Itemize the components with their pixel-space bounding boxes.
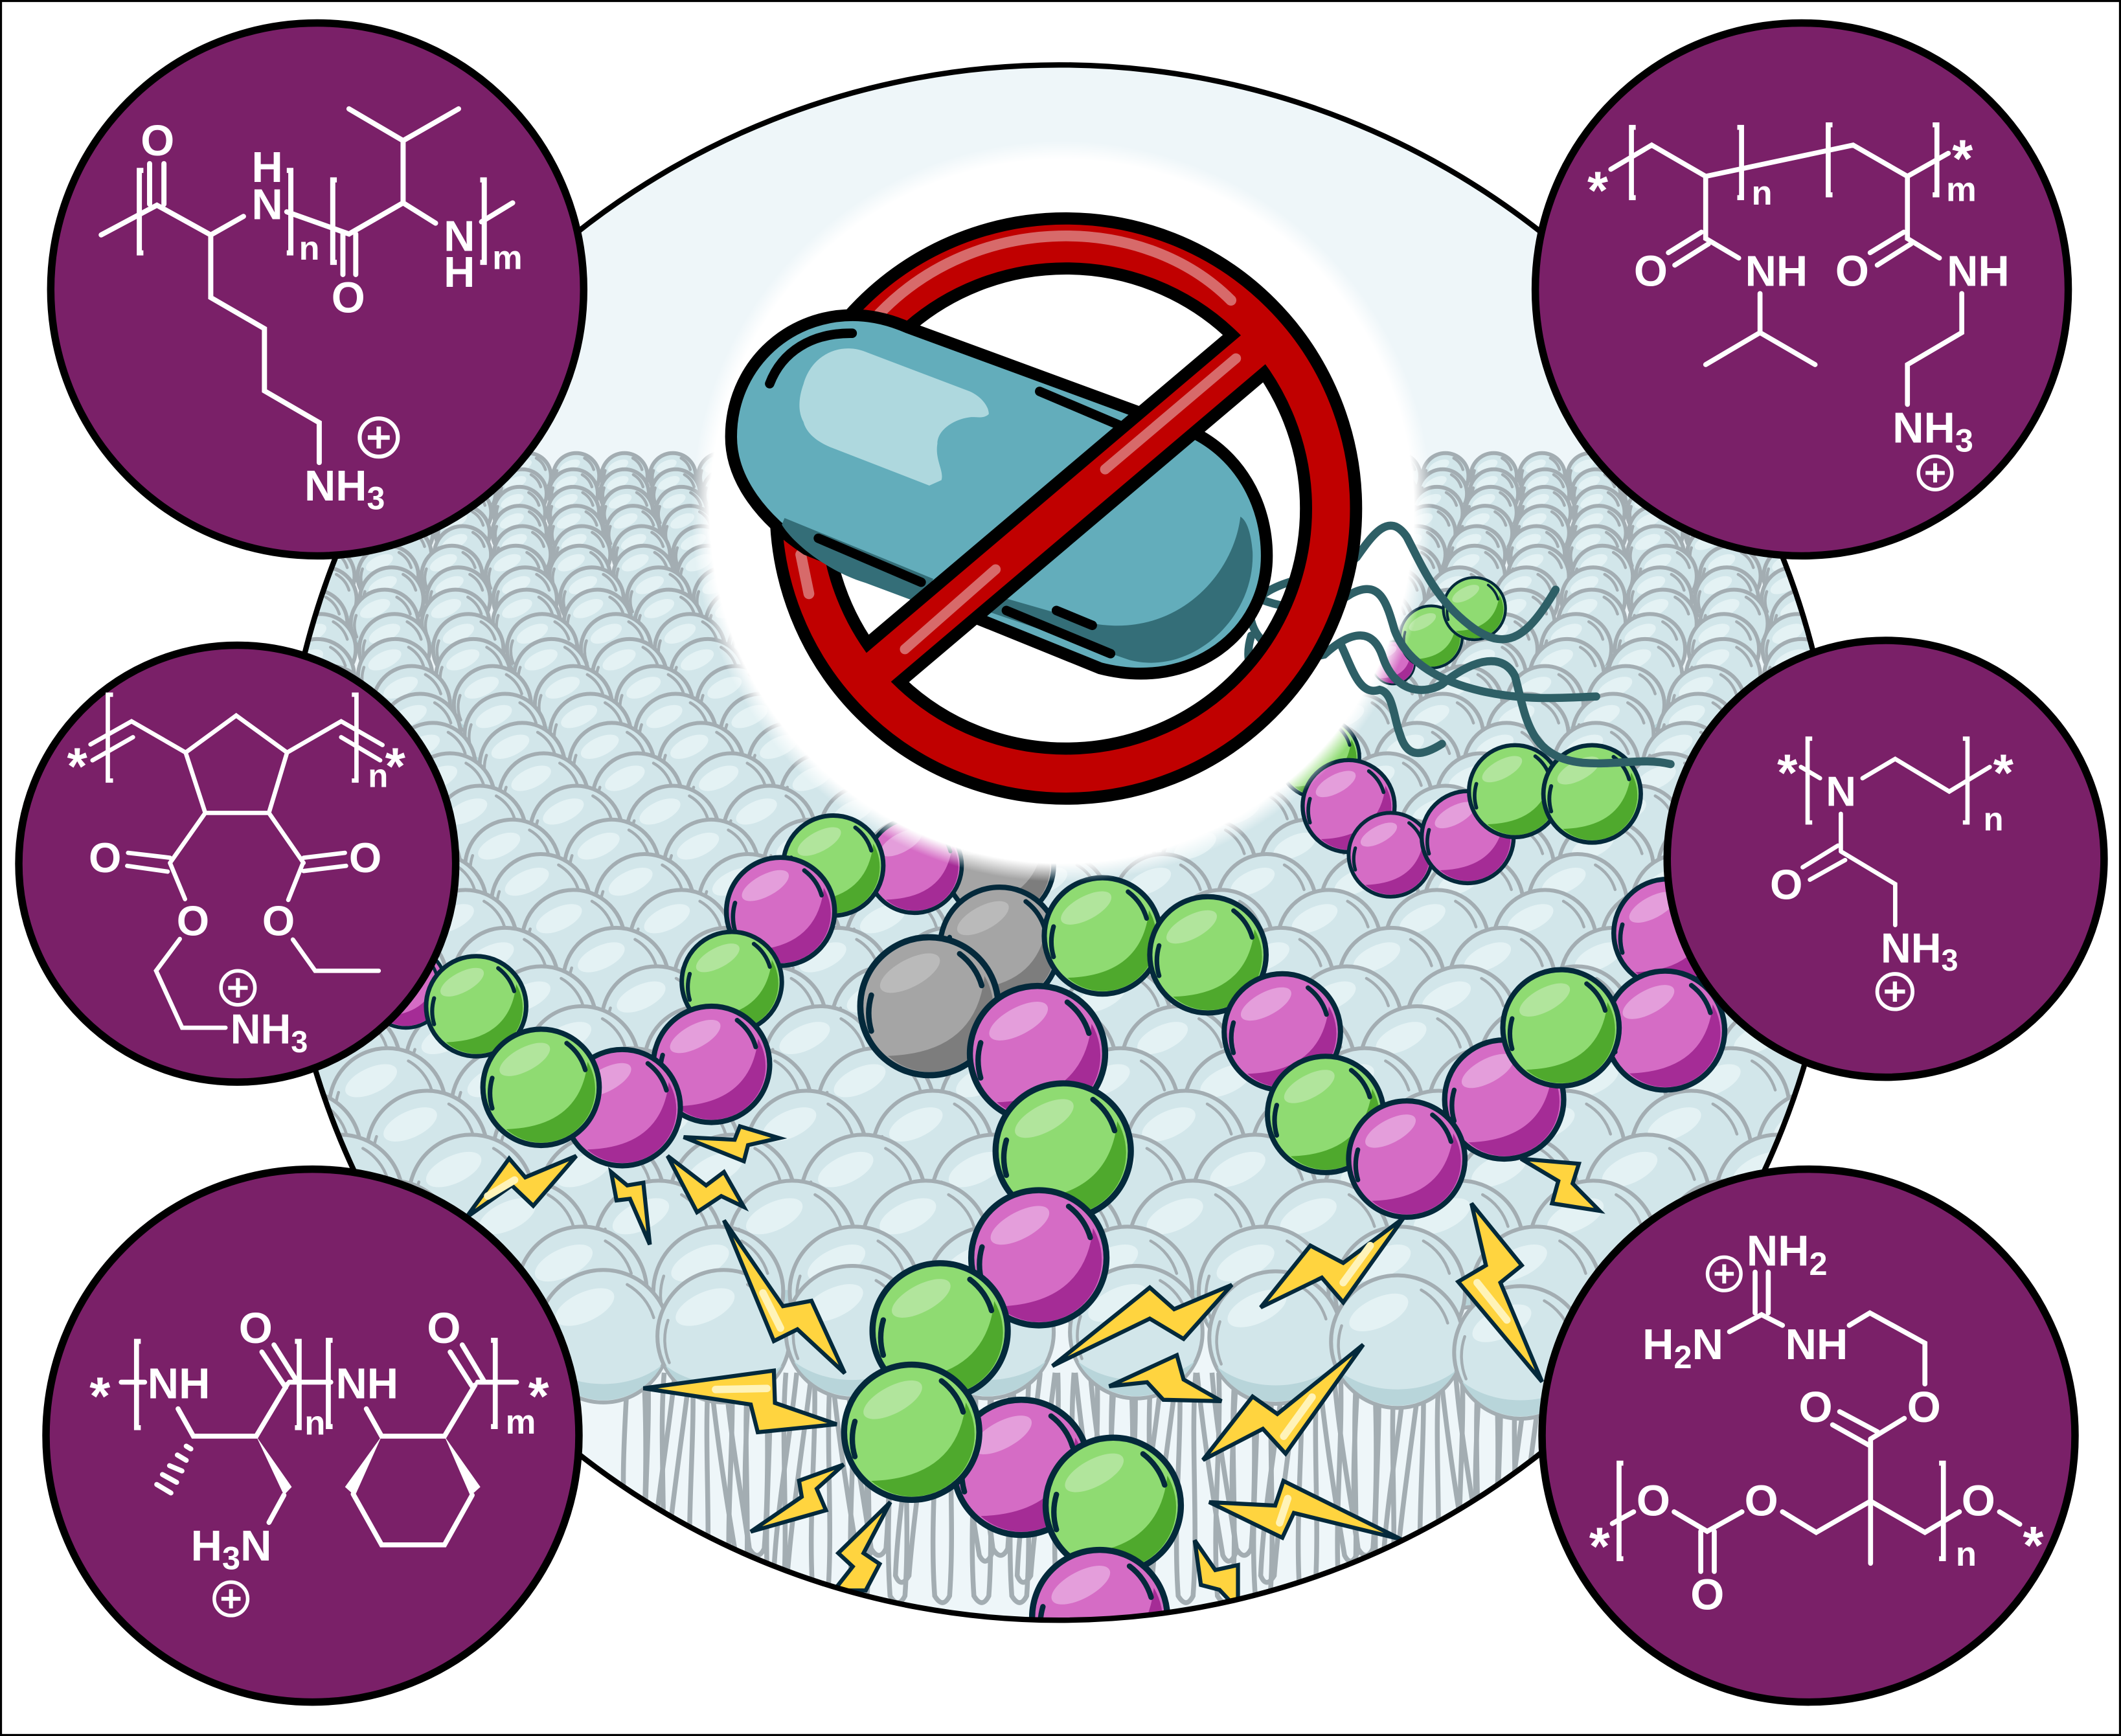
structure: labels: 3 [1955,422,1973,458]
icon: positive charge [1877,974,1912,1009]
structure: labels: H [191,1522,222,1570]
structure: labels: * [89,1367,110,1426]
structure: labels: O [1770,861,1802,908]
structure: labels: NH [1747,1227,1809,1276]
structure: brackets [137,1340,495,1428]
structure: labels [89,1304,549,1577]
structure: beta-peptide bonds [121,1345,517,1545]
structure: norbornene-derived bonds [91,716,383,1028]
structure: labels: * [1589,1517,1610,1576]
structure: labels: * [1993,744,2014,802]
structure: labels: O [239,1304,273,1353]
structure: labels: * [1952,130,1973,188]
structure: labels: NH [1786,1320,1848,1369]
panel: polymer structure bottom left [46,1169,579,1702]
structure: labels: NH [1745,247,1808,295]
structure: labels: NH [148,1359,210,1408]
structure: labels: NH [231,1006,291,1053]
polymer chain: right [1044,878,1725,1217]
icon: positive charge [1918,457,1952,490]
icon: positive charge [1708,1257,1741,1291]
structure: labels: 3 [1942,943,1958,977]
structure: labels: O [1637,1476,1670,1525]
structure: labels: 3 [367,480,385,516]
structure: wedge bonds [256,1436,481,1496]
white glow behind the no sign [691,141,1433,882]
polymer chain: upper right [1278,578,1641,897]
structure: labels: N [1692,1320,1723,1369]
structure: labels: O [177,897,209,944]
structure: labels: 3 [291,1025,308,1059]
structure: labels: N [240,1522,271,1570]
structure: labels: O [1634,247,1668,295]
structure: labels: * [385,738,406,796]
structure: labels: n [368,758,388,795]
structure: labels [141,117,523,516]
membrane circle outline [281,65,1837,1620]
structure: labels: H [251,144,283,192]
structure: brackets [1808,739,1968,822]
structure: labels: * [2023,1516,2044,1575]
structure: labels: O [1745,1476,1778,1525]
structure: labels [1770,744,2014,977]
panel: polymer structure middle left [19,645,456,1082]
structure: labels: * [528,1367,549,1426]
structure: labels: O [1799,1383,1833,1432]
structure: peptide bonds [101,109,513,462]
icon: prohibition ring [800,236,1331,774]
structure: labels: n [1984,801,2004,838]
structure: labels: n [1956,1535,1977,1573]
structure: labels: m [506,1403,536,1441]
structure: labels [1589,1227,2044,1619]
structure: labels: m [1946,171,1977,209]
structure: labels: N [251,181,283,229]
structure: labels: n [1751,174,1773,212]
bacterial flagella [1249,526,1670,764]
structure: labels: * [1777,744,1798,802]
structure: labels: O [427,1304,460,1353]
structure: labels: 3 [222,1540,240,1577]
structure: brackets [139,170,484,262]
polymer chain: centre [844,887,1181,1685]
structure: brackets [108,695,356,780]
structure: polycarbonate guanidine bonds [1613,1272,2020,1572]
structure: labels: O [349,834,381,881]
structure: labels: O [141,117,174,165]
structure: labels: NH [1881,925,1942,972]
icon: positive charge [359,418,398,457]
structure: labels: N [1826,767,1856,815]
structure: labels: m [492,240,523,277]
structure: brackets [1631,125,1937,197]
structure: labels: H [444,249,475,297]
structure: acrylamide bonds [1611,145,1962,404]
structure: labels: NH [304,462,367,510]
panel: polymer structure middle right [1667,640,2104,1077]
icon: positive charge [221,971,255,1005]
structure: labels: * [1587,161,1608,220]
icons: lightning bolts [466,1126,1600,1609]
structure: labels: NH [1947,247,2010,295]
structure: labels: n [299,230,319,267]
lipid tails [624,1373,1602,1603]
structure: labels: * [67,738,88,796]
structure: labels [1587,130,2010,458]
structure: labels: O [1907,1383,1941,1432]
panel: magnified membrane circle [308,67,1809,1618]
structure: labels: NH [1892,404,1955,453]
polymer chain: left [365,811,1054,1166]
panel: polymer structure bottom right [1542,1169,2075,1702]
structure: labels: O [89,834,121,881]
structure: labels: O [1690,1571,1724,1619]
structure: labels: 2 [1809,1245,1828,1282]
structure: labels: O [1962,1476,1995,1525]
structure: labels: NH [335,1359,398,1408]
structure: labels: O [1835,247,1869,295]
structure: labels: N [444,212,475,260]
icon: positive charge [214,1582,247,1616]
icon: bacterium capsule [731,315,1267,673]
structure: labels [67,738,406,1059]
panel: polymer structure top right [1536,23,2069,556]
structure: labels: 2 [1674,1338,1692,1375]
structure: labels: O [332,274,365,322]
structure: labels: n [304,1404,325,1443]
structure: brackets [1619,1463,1944,1559]
membrane backdrop [281,65,1837,1620]
icon: prohibition bar [864,337,1268,680]
structure: labels: H [1642,1320,1674,1369]
panel: polymer structure top left [51,23,584,556]
lipid head group rows [308,451,1809,1421]
structure: labels: O [262,897,295,944]
structure: polyethyleneimine-glycine bonds [1801,759,1990,925]
